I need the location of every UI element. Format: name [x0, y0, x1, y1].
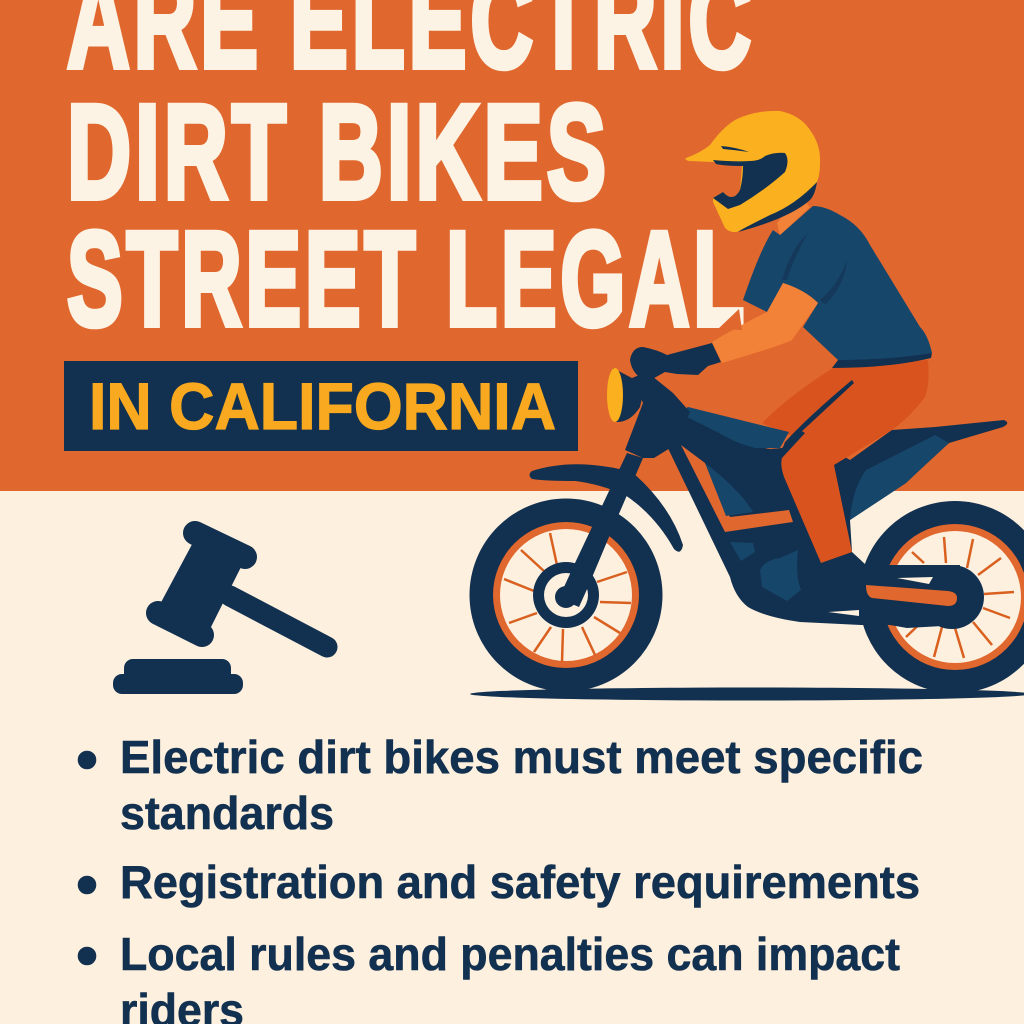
bike body [665, 402, 1007, 628]
front wheel [470, 498, 662, 692]
headlight [607, 368, 645, 422]
front fender [530, 464, 683, 552]
bullet 3: Local rules and penalties can impact [120, 928, 900, 980]
bullet 1: Electric dirt bikes must meet specific [120, 731, 923, 783]
rear wheel [859, 501, 1024, 693]
fork and steering assembly [555, 372, 690, 608]
panel: orange header background [0, 0, 1024, 491]
rider neck [777, 195, 810, 235]
bullet 3 [78, 928, 900, 1024]
panel: cream lower background [0, 491, 1024, 1024]
bullet 1: standards [120, 787, 334, 839]
rider arm [712, 283, 818, 363]
orange frame stripe [681, 445, 793, 532]
subtitle banner: IN CALIFORNIA [89, 369, 556, 443]
ground shadow [470, 688, 1024, 700]
title: DIRT BIKES [67, 78, 610, 227]
title L cut [718, 309, 742, 330]
bullet list [78, 731, 923, 1024]
rider shirt [743, 206, 932, 368]
icon: rider on electric dirt bike [470, 111, 1024, 701]
rider glove [630, 343, 721, 382]
icon: gavel [113, 533, 327, 694]
rear thigh [762, 368, 860, 440]
rider leg [781, 360, 929, 563]
under helmet shadow [738, 182, 817, 232]
orange swingarm guard [866, 585, 957, 606]
bike strut [780, 380, 854, 455]
title [67, 0, 755, 354]
blue seat and panels [679, 407, 949, 601]
frame slits [828, 577, 933, 616]
bullet 1 [78, 731, 923, 839]
bullet 2: Registration and safety requirements [120, 856, 920, 908]
helmet [685, 111, 820, 232]
